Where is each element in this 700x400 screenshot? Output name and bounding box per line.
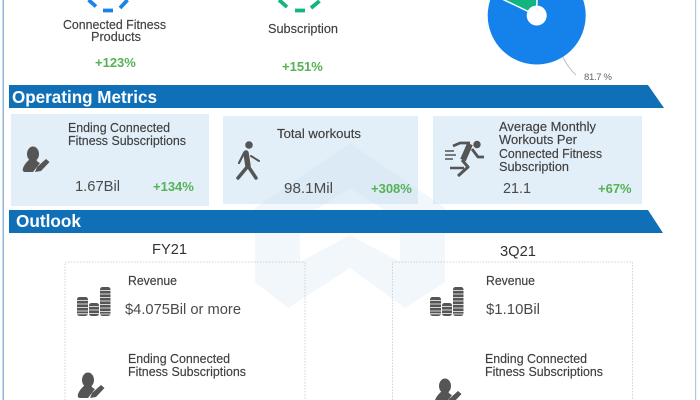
panel: ending connected fitness subscriptions: Ending Connected	[68, 121, 170, 135]
watermark chevrons	[255, 143, 445, 308]
panel: 3Q21 outlook: 3Q21	[500, 244, 536, 260]
value: subscription growth: +151%	[282, 59, 323, 74]
panel: ending connected fitness subscriptions: +134%	[153, 179, 194, 194]
panel: average monthly workouts: Workouts Per	[499, 133, 577, 147]
panel: ending connected fitness subscriptions: 1.67Bil	[75, 178, 120, 195]
panel: total workouts	[223, 116, 445, 308]
panel: FY21 outlook: FY21	[152, 242, 187, 258]
heading: operating metrics	[9, 85, 664, 108]
pie chart	[488, 0, 613, 83]
panel: 3Q21 outlook: Fitness Subscriptions	[485, 365, 603, 379]
icon: coin stacks	[430, 287, 464, 316]
icon: person with pencil	[78, 372, 104, 398]
panel: FY21 outlook: Ending Connected	[128, 352, 230, 366]
heading: outlook: Outlook	[16, 211, 81, 231]
label: subscription: Subscription	[268, 22, 338, 36]
panel: 3Q21 outlook	[392, 244, 632, 400]
panel: FY21 outlook: Revenue	[128, 274, 177, 288]
panel: FY21 outlook: $4.075Bil or more	[125, 301, 241, 318]
value: products growth: +123%	[95, 55, 136, 70]
panel: total workouts: 98.1Mil	[284, 180, 333, 197]
panel: ending connected fitness subscriptions	[11, 114, 209, 206]
panel: FY21 outlook: Fitness Subscriptions	[128, 365, 246, 379]
icon: green dashed ring	[279, 0, 320, 10]
label: connected fitness products: Connected Fitness	[63, 18, 166, 32]
panel: FY21 outlook	[65, 242, 305, 400]
panel: ending connected fitness subscriptions: Fitness Subscriptions	[68, 134, 186, 148]
panel: 3Q21 outlook: $1.10Bil	[486, 301, 540, 318]
icon: coin stacks	[77, 287, 110, 316]
panel: average monthly workouts	[433, 116, 642, 204]
panel: average monthly workouts: Connected Fitness	[499, 147, 602, 161]
label: products: Products	[91, 30, 141, 44]
icon: person with pencil	[23, 146, 50, 172]
panel: average monthly workouts: +67%	[598, 181, 632, 196]
icon: blue dashed ring	[88, 0, 128, 10]
icon: person with pencil	[435, 378, 462, 400]
panel: 3Q21 outlook: Ending Connected	[485, 352, 587, 366]
pie chart: 81.7 %	[584, 72, 613, 83]
heading: operating metrics: Operating Metrics	[12, 87, 157, 107]
panel: total workouts: Total workouts	[277, 127, 361, 141]
panel: total workouts: +308%	[371, 181, 412, 196]
heading: outlook	[9, 210, 663, 233]
icon: running person	[445, 141, 484, 176]
panel: average monthly workouts: Subscription	[499, 160, 569, 174]
panel: 3Q21 outlook: Revenue	[486, 274, 535, 288]
panel: average monthly workouts: 21.1	[503, 180, 531, 197]
panel: revenue breakdown	[63, 0, 613, 83]
icon: walking person	[238, 141, 259, 178]
panel: average monthly workouts: Average Monthly	[499, 120, 597, 134]
